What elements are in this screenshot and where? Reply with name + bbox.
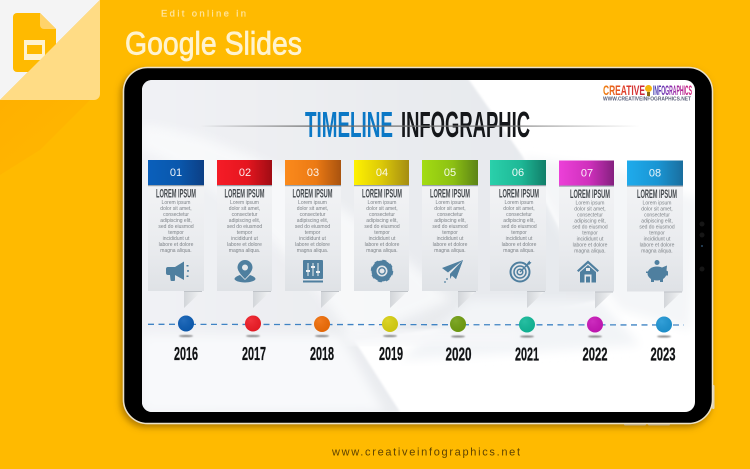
panel: card 08: adipiscing elit,: [641, 218, 673, 224]
panel: card 01: incididunt ut: [163, 236, 190, 242]
panel: card 01: LOREM IPSUM: [156, 188, 196, 200]
panel: card 08: tempor: [649, 230, 665, 236]
panel: card 07: sed do eiusmod: [572, 224, 608, 230]
footer url: www.creativeinfographics.net: [331, 446, 520, 458]
panel: card 01: sed do eiusmod: [158, 224, 194, 230]
panel: card 02: consectetur: [232, 212, 258, 218]
marker: 2016: 2016: [174, 343, 198, 364]
panel: card 05: labore et dolore: [433, 242, 468, 248]
panel: card 01: magna aliqua.: [160, 248, 192, 254]
panel: card 04: magna aliqua.: [366, 248, 398, 254]
panel: card 04: [354, 160, 409, 308]
panel: card 02: labore et dolore: [227, 242, 262, 248]
panel: card 02: 02: [239, 167, 251, 179]
marker: 2018: 2018: [310, 343, 334, 364]
icon: target: [510, 260, 532, 282]
panel: card 07: labore et dolore: [573, 242, 608, 248]
marker: 2021: 2021: [515, 344, 539, 364]
corner badge: Google Slides: [0, 0, 100, 175]
panel: card 08: sed do eiusmod: [639, 224, 675, 230]
panel: card 03: [285, 160, 341, 308]
panel: card 07: magna aliqua.: [574, 248, 606, 254]
panel: card 07: LOREM IPSUM: [570, 189, 610, 201]
panel: card 06: adipiscing elit,: [503, 218, 535, 224]
panel: card 08: dolor sit amet,: [641, 206, 673, 212]
panel: card 03: incididunt ut: [299, 236, 326, 242]
marker: 2020: [446, 316, 472, 364]
marker: 2021: [515, 316, 539, 364]
panel: card 06: incididunt ut: [506, 236, 533, 242]
marker: 2022: 2022: [582, 344, 608, 364]
marker: 2023: 2023: [650, 344, 676, 364]
panel: card 06: consectetur: [506, 212, 532, 218]
panel: card 01: labore et dolore: [159, 242, 194, 248]
panel: card 07: tempor: [582, 230, 598, 236]
panel: card 02: LOREM IPSUM: [224, 188, 264, 200]
panel: card 06: magna aliqua.: [503, 248, 535, 254]
logo: Creative Infographics: CREATIVE: [603, 82, 645, 98]
marker: 2022: [582, 316, 608, 364]
panel: card 07: [559, 160, 614, 308]
panel: card 03: LOREM IPSUM: [292, 188, 332, 200]
panel: card 04: labore et dolore: [365, 242, 400, 248]
panel: card 07: incididunt ut: [577, 236, 604, 242]
panel: card 05: sed do eiusmod: [432, 224, 468, 230]
panel: card 01: adipiscing elit,: [160, 218, 192, 224]
screen: [130, 70, 700, 412]
panel: card 03: consectetur: [300, 212, 326, 218]
icon: piggy bank: [646, 260, 668, 282]
marker: 2016: [174, 316, 198, 364]
panel: card 07: 07: [581, 168, 593, 180]
panel: card 02: dolor sit amet,: [229, 206, 260, 212]
icon: house: [577, 260, 599, 282]
panel: card 07: consectetur: [577, 212, 603, 218]
panel: card 01: tempor: [168, 230, 184, 236]
panel: card 05: consectetur: [437, 212, 463, 218]
panel: card 08: [627, 160, 683, 308]
panel: card 01: Lorem ipsum: [162, 200, 190, 206]
panel: card 08: LOREM IPSUM: [637, 189, 677, 201]
marker: 2017: [242, 316, 266, 364]
panel: card 06: sed do eiusmod: [501, 224, 537, 230]
tablet: [124, 68, 714, 426]
marker: 2023: [650, 316, 676, 364]
panel: card 07: adipiscing elit,: [574, 218, 606, 224]
marker: 2017: 2017: [242, 343, 266, 364]
panel: card 06: tempor: [511, 230, 527, 236]
heading: Google Slides: Google Slides: [125, 26, 302, 62]
panel: card 05: tempor: [442, 230, 458, 236]
panel: card 02: incididunt ut: [231, 236, 258, 242]
marker: 2018: [310, 316, 334, 364]
panel: card 05: [422, 160, 478, 308]
panel: card 06: 06: [512, 167, 524, 179]
logo: Creative Infographics: WWW.CREATIVEINFOGRAPHICS.NET: [603, 96, 691, 102]
icon: megaphone: [166, 262, 189, 281]
panel: card 01: [148, 160, 204, 308]
panel: card 05: dolor sit amet,: [434, 206, 466, 212]
icon: slides document: [13, 13, 56, 72]
title: [200, 104, 640, 145]
panel: card 06: [490, 160, 546, 308]
panel: card 05: adipiscing elit,: [434, 218, 466, 224]
timeline dashed line: [148, 323, 684, 326]
panel: card 01: consectetur: [163, 212, 189, 218]
panel: card 03: magna aliqua.: [297, 248, 328, 254]
panel: card 05: 05: [444, 167, 456, 179]
panel: card 04: adipiscing elit,: [366, 218, 398, 224]
panel: card 06: LOREM IPSUM: [499, 188, 539, 200]
panel: card 03: adipiscing elit,: [297, 218, 328, 224]
icon: equalizer: [303, 260, 323, 282]
panel: card 04: 04: [376, 167, 388, 179]
panel: card 04: LOREM IPSUM: [362, 188, 402, 200]
panel: card 05: magna aliqua.: [434, 248, 466, 254]
panel: card 02: [217, 160, 272, 308]
logo: Creative Infographics: [603, 82, 692, 102]
panel: card 02: Lorem ipsum: [230, 200, 259, 206]
panel: card 06: labore et dolore: [502, 242, 537, 248]
icon: paper plane: [442, 260, 463, 283]
panel: card 08: 08: [649, 168, 661, 180]
icon: gear: [372, 261, 392, 281]
panel: card 04: Lorem ipsum: [368, 200, 396, 206]
panel: card 04: sed do eiusmod: [364, 224, 400, 230]
panel: card 05: Lorem ipsum: [436, 200, 464, 206]
panel: card 02: tempor: [237, 230, 253, 236]
icon: location pin: [234, 260, 256, 282]
panel: card 03: Lorem ipsum: [298, 200, 327, 206]
panel: card 04: incididunt ut: [369, 236, 396, 242]
panel: card 01: dolor sit amet,: [160, 206, 192, 212]
panel: card 04: consectetur: [369, 212, 395, 218]
panel: card 05: LOREM IPSUM: [430, 188, 470, 200]
panel: card 08: incididunt ut: [644, 236, 671, 242]
panel: card 06: Lorem ipsum: [505, 200, 533, 206]
panel: card 01: 01: [170, 167, 182, 179]
panel: card 08: consectetur: [644, 212, 670, 218]
marker: 2020: 2020: [446, 344, 472, 364]
panel: card 06: dolor sit amet,: [503, 206, 535, 212]
panel: card 03: tempor: [305, 230, 321, 236]
panel: card 02: sed do eiusmod: [227, 224, 262, 230]
marker: 2019: 2019: [379, 343, 403, 364]
panel: card 04: dolor sit amet,: [366, 206, 398, 212]
panel: card 05: incididunt ut: [437, 236, 464, 242]
panel: card 02: magna aliqua.: [229, 248, 260, 254]
panel: card 02: adipiscing elit,: [229, 218, 260, 224]
text: edit online in: Edit online in: [161, 8, 246, 20]
panel: card 04: tempor: [374, 230, 390, 236]
panel: card 08: labore et dolore: [640, 242, 675, 248]
marker: 2019: [379, 316, 403, 364]
panel: card 03: dolor sit amet,: [297, 206, 328, 212]
panel: card 07: dolor sit amet,: [574, 206, 606, 212]
panel: card 08: magna aliqua.: [641, 248, 673, 254]
panel: card 03: labore et dolore: [295, 242, 330, 248]
panel: card 03: 03: [307, 167, 319, 179]
panel: card 08: Lorem ipsum: [643, 200, 671, 206]
panel: card 07: Lorem ipsum: [576, 200, 604, 206]
title: INFOGRAPHIC: [401, 104, 530, 145]
panel: card 03: sed do eiusmod: [295, 224, 330, 230]
title: TIMELINE: [305, 104, 393, 145]
